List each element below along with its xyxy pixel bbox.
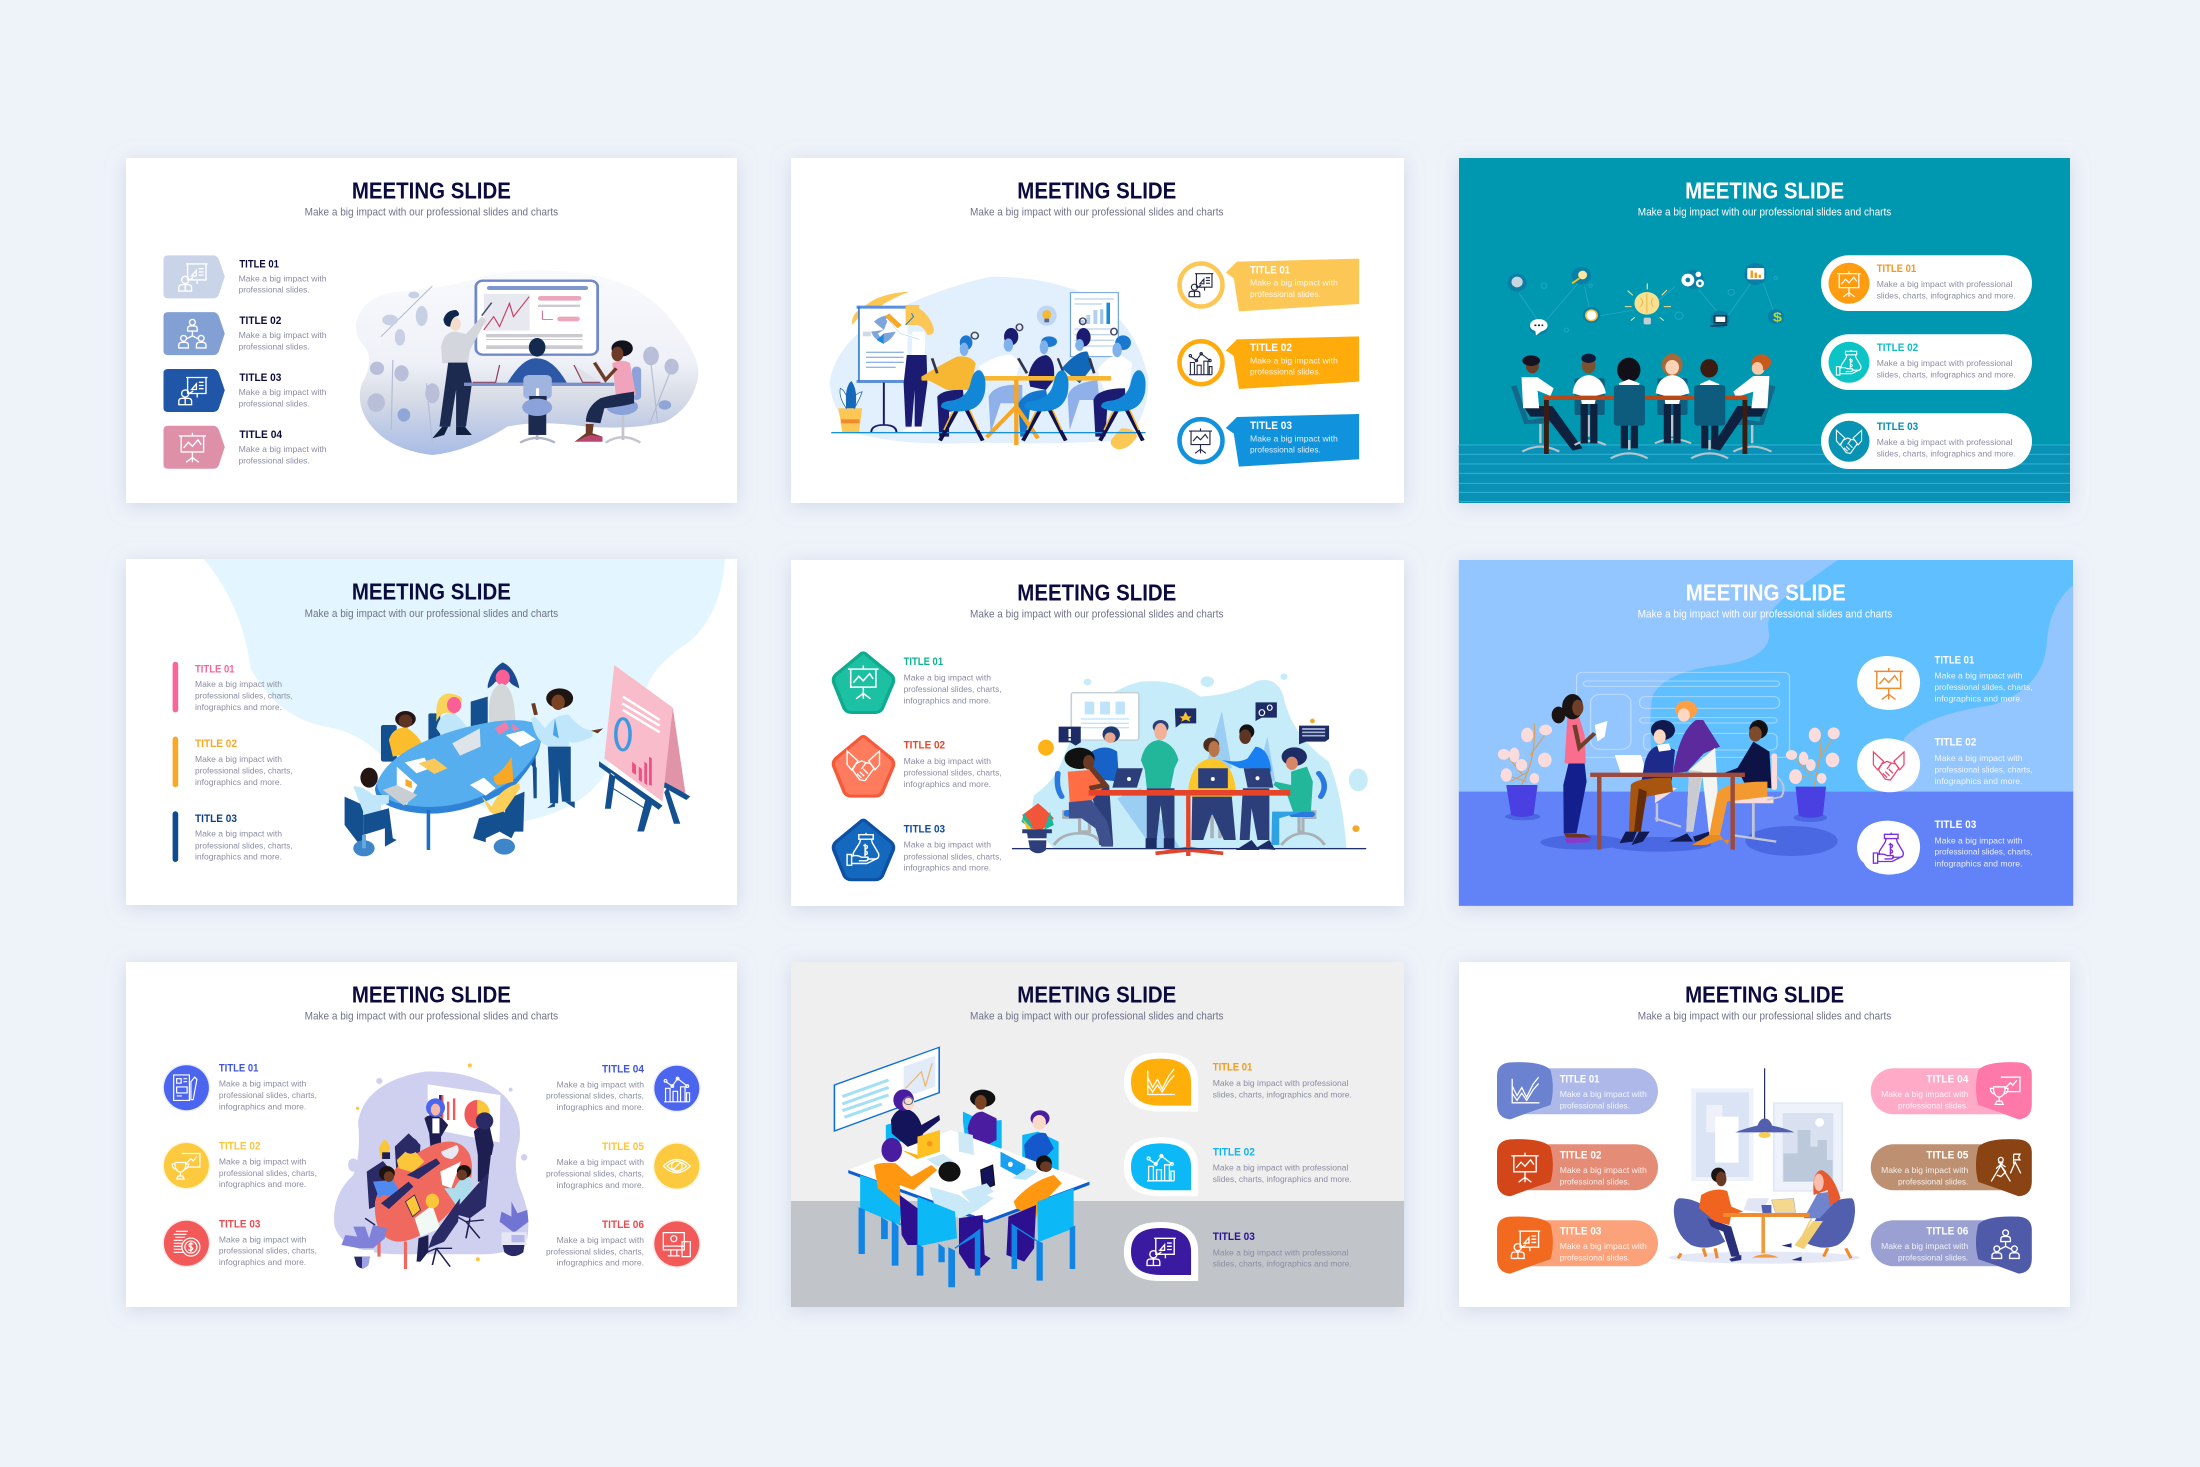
panel: slide 8 [791,962,1404,1307]
item: title 02: professional slides, charts, [904,768,1002,778]
item: title 03: professional slides. [239,398,310,408]
item: title 05 [1871,1139,2032,1196]
item: title 02 [1124,1137,1352,1196]
item: title 01 [1124,1053,1352,1112]
item: title 01: Make a big impact with professional [1877,279,2013,289]
item: title 01: professional slides. [1560,1101,1630,1111]
item: title 04: TITLE 04 [239,429,283,441]
item: title 02: professional slides, charts, [219,1168,317,1178]
illustration: team meeting at table [830,277,1148,449]
item: title 01: Make a big impact with [195,679,282,689]
panel: slide 9 [1459,962,2070,1307]
title: MEETING SLIDE [1017,982,1176,1008]
item: title 01: TITLE 01 [904,656,943,668]
item: title 02: professional slides, charts, [1934,764,2032,774]
item: title 01: Make a big impact with [1250,278,1338,288]
item: title 03: infographics and more. [195,852,282,862]
item: title 05: TITLE 05 [1926,1149,1968,1161]
item: title 05: professional slides, charts, [546,1168,644,1178]
item: title 03 [1124,1222,1352,1281]
floor band [791,1201,1404,1307]
panel: slide 6 [1459,560,2073,906]
item: title 01: TITLE 01 [1213,1062,1252,1074]
item: title 06: professional slides. [1898,1253,1968,1263]
item: title 04 [163,426,327,469]
item: title 03 [1821,413,2032,469]
item: title 01: professional slides, charts, [195,691,293,701]
item: title 02: slides, charts, infographics and more. [1213,1174,1352,1184]
subtitle: Make a big impact with our professional slides and charts [970,609,1224,621]
item: title 01: Make a big impact with [1934,671,2023,681]
item: title 06: Make a big impact with [1881,1241,1969,1251]
subtitle: Make a big impact with our professional slides and charts [1638,207,1892,219]
panel: slide 5 [791,560,1404,906]
item: title 01: infographics and more. [195,702,282,712]
item: title 01: Make a big impact with professional [1213,1078,1348,1088]
item: title 03 [162,1218,317,1267]
item: title 02: TITLE 02 [219,1140,260,1152]
item: title 05: professional slides. [1898,1177,1968,1187]
item: title 02: slides, charts, infographics and more. [1877,369,2016,379]
item: title 02: TITLE 02 [1213,1146,1255,1158]
item: title 02 [1180,336,1359,389]
item: title 02: Make a big impact with [1560,1165,1647,1175]
subtitle: Make a big impact with our professional slides and charts [305,1011,559,1023]
item: title 03: Make a big impact with [195,829,282,839]
item: title 03: TITLE 03 [1560,1225,1602,1237]
item: title 01: professional slides. [1250,289,1321,299]
item: title 01: Make a big impact with [219,1079,307,1089]
item: title 06: Make a big impact with [557,1235,644,1245]
item: title 02: TITLE 02 [195,738,237,750]
panel: slide 3 [1459,158,2070,503]
item: title 03: infographics and more. [219,1257,306,1267]
background waves and floor [1459,560,2073,906]
item: title 04: Make a big impact with [1881,1089,1969,1099]
item: title 02: TITLE 02 [1250,342,1292,354]
item: title 03: TITLE 03 [1877,421,1918,433]
title: MEETING SLIDE [352,178,511,204]
item: title 02: Make a big impact with [1250,355,1338,365]
item: title 01: slides, charts, infographics and more. [1877,290,2016,300]
item: title 04: professional slides. [1898,1101,1968,1111]
item: title 02: Make a big impact with [239,330,327,340]
item: title 02: professional slides. [1560,1177,1630,1187]
illustration: presenter and team at screen [356,270,698,455]
floor stripes [1459,445,2070,503]
item: title 03: infographics and more. [1934,858,2022,868]
subtitle: Make a big impact with our professional slides and charts [1638,609,1893,621]
item: title 02: Make a big impact with [195,754,282,764]
item: title 03: professional slides, charts, [219,1246,317,1256]
item: title 01: TITLE 01 [219,1063,258,1075]
subtitle: Make a big impact with our professional slides and charts [305,207,559,219]
item: title 03: Make a big impact with [219,1234,307,1244]
item: title 03: Make a big impact with [1560,1241,1647,1251]
item: title 02 [162,1140,317,1190]
item: title 04: professional slides. [239,455,310,465]
item: title 02: Make a big impact with [219,1156,307,1166]
item: title 03: Make a big impact with professional [1877,437,2013,447]
item: title 02: infographics and more. [1934,776,2022,786]
item: title 01 [1857,654,2032,710]
item: title 06 [1871,1216,2032,1274]
subtitle: Make a big impact with our professional slides and charts [305,608,559,620]
item: title 03 [173,811,293,862]
item: title 05 [546,1141,701,1190]
item: title 05: infographics and more. [557,1180,644,1190]
item: title 03 [163,369,327,412]
item: title 03: TITLE 03 [219,1218,260,1230]
item: title 03: Make a big impact with [239,387,327,397]
item: title 02: professional slides. [239,342,310,352]
title: MEETING SLIDE [352,982,511,1008]
item: title 02 [1857,737,2032,792]
illustration: idea network and team: $ [1773,311,1782,325]
item: title 03: professional slides, charts, [904,851,1002,861]
item: title 04: infographics and more. [557,1102,644,1112]
item: title 02: Make a big impact with professional [1213,1163,1348,1173]
item: title 01: professional slides. [239,285,310,295]
item: title 03 [1857,819,2032,875]
item: title 01: infographics and more. [219,1101,306,1111]
panel: slide 4 [126,559,737,905]
item: title 03: professional slides. [1560,1253,1630,1263]
item: title 02: infographics and more. [219,1179,306,1189]
item: title 06: TITLE 06 [1926,1225,1968,1237]
item: title 02: professional slides, charts, [195,766,293,776]
item: title 03: slides, charts, infographics and more. [1213,1259,1352,1269]
item: title 01: TITLE 01 [1877,263,1916,275]
item: title 04: Make a big impact with [239,444,327,454]
item: title 03: TITLE 03 [1250,420,1292,432]
illustration: team with speech bubbles [1012,673,1368,856]
item: title 02 [1497,1139,1658,1196]
title: MEETING SLIDE [1685,982,1844,1008]
item: title 02 [163,312,327,355]
item: title 01 [162,1063,317,1112]
item: title 01: Make a big impact with [904,672,991,682]
item: title 01 [163,255,327,298]
item: title 01 [1180,259,1359,311]
item: title 03 [836,822,1002,878]
item: title 02: infographics and more. [195,777,282,787]
item: title 05: Make a big impact with [557,1157,644,1167]
item: title 04 [1871,1062,2032,1119]
subtitle: Make a big impact with our professional slides and charts [970,1011,1224,1023]
title: MEETING SLIDE [1017,178,1176,204]
item: title 02: Make a big impact with professional [1877,358,2013,368]
item: title 01: Make a big impact with [239,273,327,283]
panel: slide 2 [791,158,1404,503]
item: title 02: Make a big impact with [1934,753,2023,763]
illustration: two people at cafe table [1669,1068,1860,1264]
item: title 02: TITLE 02 [904,740,945,752]
item: title 03: professional slides, charts, [195,840,293,850]
item: title 02 [1821,334,2032,390]
item: title 03: TITLE 03 [1213,1231,1255,1243]
item: title 01: TITLE 01 [195,663,234,675]
illustration: team at desk with ghost screen [1498,672,1840,856]
item: title 01: professional slides, charts, [904,684,1002,694]
item: title 01: infographics and more. [904,695,991,705]
item: title 06: professional slides, charts, [546,1246,644,1256]
item: title 02: TITLE 02 [1934,737,1976,749]
illustration: isometric team at white table [834,1047,1089,1287]
item: title 01: slides, charts, infographics and more. [1213,1089,1352,1099]
item: title 06: TITLE 06 [602,1219,644,1231]
panel: slide 7 [126,962,737,1307]
item: title 03: infographics and more. [904,863,991,873]
item: title 06: infographics and more. [557,1258,644,1268]
subtitle: Make a big impact with our professional slides and charts [970,207,1224,219]
item: title 01 [1821,255,2032,311]
item: title 04: Make a big impact with [557,1079,644,1089]
item: title 01 [1497,1062,1658,1119]
illustration: isometric round table meeting [204,559,725,856]
item: title 03 [1497,1216,1658,1274]
item: title 01 [173,662,293,712]
item: title 03: TITLE 03 [1934,819,1976,831]
item: title 03: Make a big impact with [1934,835,2023,845]
illustration: overhead team meeting [334,1063,528,1269]
title: MEETING SLIDE [1017,580,1176,606]
title: MEETING SLIDE [352,578,511,604]
item: title 01: Make a big impact with [1560,1089,1647,1099]
item: title 05: TITLE 05 [602,1141,644,1153]
item: title 03: professional slides. [1250,445,1321,455]
item: title 03: TITLE 03 [904,823,945,835]
item: title 02: Make a big impact with [904,756,991,766]
item: title 02: professional slides. [1250,367,1321,377]
item: title 01: professional slides, charts, [219,1090,317,1100]
item: title 02: TITLE 02 [239,315,281,327]
item: title 03: slides, charts, infographics and more. [1877,448,2016,458]
item: title 03: Make a big impact with [904,840,991,850]
item: title 01: TITLE 01 [1560,1073,1600,1085]
item: title 01: TITLE 01 [1934,654,1974,666]
item: title 01: TITLE 01 [1250,264,1290,276]
item: title 04: professional slides, charts, [546,1091,644,1101]
item: title 03: TITLE 03 [195,813,237,825]
item: title 04 [546,1063,701,1112]
item: title 02 [173,736,293,787]
item: title 05: Make a big impact with [1881,1165,1969,1175]
item: title 01: TITLE 01 [239,258,279,270]
item: title 02: TITLE 02 [1877,342,1918,354]
item: title 01 [836,655,1002,710]
item: title 03: TITLE 03 [239,372,281,384]
title: MEETING SLIDE [1686,580,1846,606]
item: title 02 [836,739,1002,794]
illustration: idea network and team [1507,263,1784,458]
item: title 01: professional slides, charts, [1934,682,2032,692]
item: title 04: TITLE 04 [1926,1073,1969,1085]
panel: slide 1 [126,158,737,503]
subtitle: Make a big impact with our professional slides and charts [1638,1011,1892,1023]
item: title 03: professional slides, charts, [1934,847,2032,857]
item: title 03: Make a big impact with professional [1213,1247,1348,1257]
item: title 02: infographics and more. [904,779,991,789]
item: title 01: infographics and more. [1934,694,2022,704]
item: title 04: TITLE 04 [602,1063,645,1075]
item: title 03 [1180,414,1359,467]
item: title 02: TITLE 02 [1560,1149,1602,1161]
title: MEETING SLIDE [1685,178,1844,204]
item: title 03: Make a big impact with [1250,433,1338,443]
item: title 06 [546,1219,701,1268]
